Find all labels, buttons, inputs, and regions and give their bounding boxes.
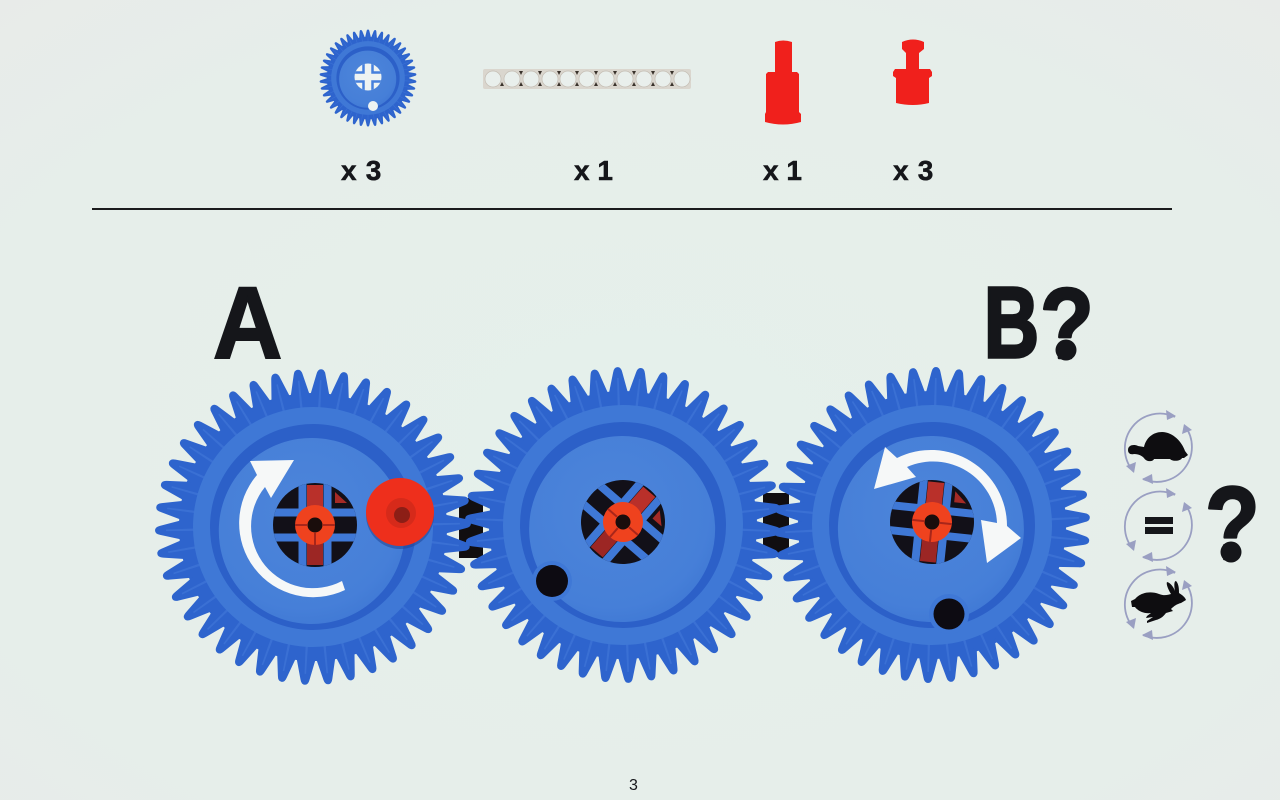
icon: small blue gear	[320, 30, 416, 126]
gear A	[102, 325, 524, 729]
heading: B?: B	[984, 267, 1039, 378]
middle gear peg hole	[532, 561, 572, 601]
dark mesh gap between middle gear and B	[763, 493, 789, 557]
icon: white beam with holes	[483, 69, 691, 89]
divider line	[92, 208, 1172, 210]
big question mark: ?	[1205, 465, 1260, 582]
icon: long red pin	[765, 40, 801, 124]
icon: turtle slower	[1125, 410, 1192, 484]
label: x 3 gears: x 3	[341, 155, 382, 186]
gear A axle hub	[271, 481, 359, 569]
gear B axle hub	[884, 474, 980, 570]
red crank peg	[366, 478, 434, 549]
heading: B?	[984, 267, 1094, 379]
gear train	[102, 325, 1139, 729]
middle gear axle hub	[561, 460, 685, 584]
heading: B?: ?	[1040, 268, 1094, 379]
label: x 3 short pin: x 3	[893, 155, 934, 186]
label: x 1 beam: x 1	[574, 155, 613, 186]
arrow: gear A counter-clockwise rotation	[239, 460, 345, 597]
label: x 1 long pin: x 1	[763, 155, 802, 186]
gear B peg hole	[929, 594, 969, 634]
page number: 3	[629, 777, 638, 794]
icon: equals same speed	[1125, 488, 1192, 562]
parts list	[320, 30, 933, 180]
speed comparison icons	[1125, 410, 1192, 640]
gear B	[725, 328, 1139, 722]
icon: short red pin	[893, 40, 932, 105]
heading: A: A	[213, 265, 282, 380]
icon: rabbit faster	[1125, 566, 1192, 640]
dark mesh gap between gears A and middle	[459, 498, 483, 558]
arrow: gear B double-headed rotation	[874, 447, 1021, 563]
middle gear	[415, 327, 831, 723]
